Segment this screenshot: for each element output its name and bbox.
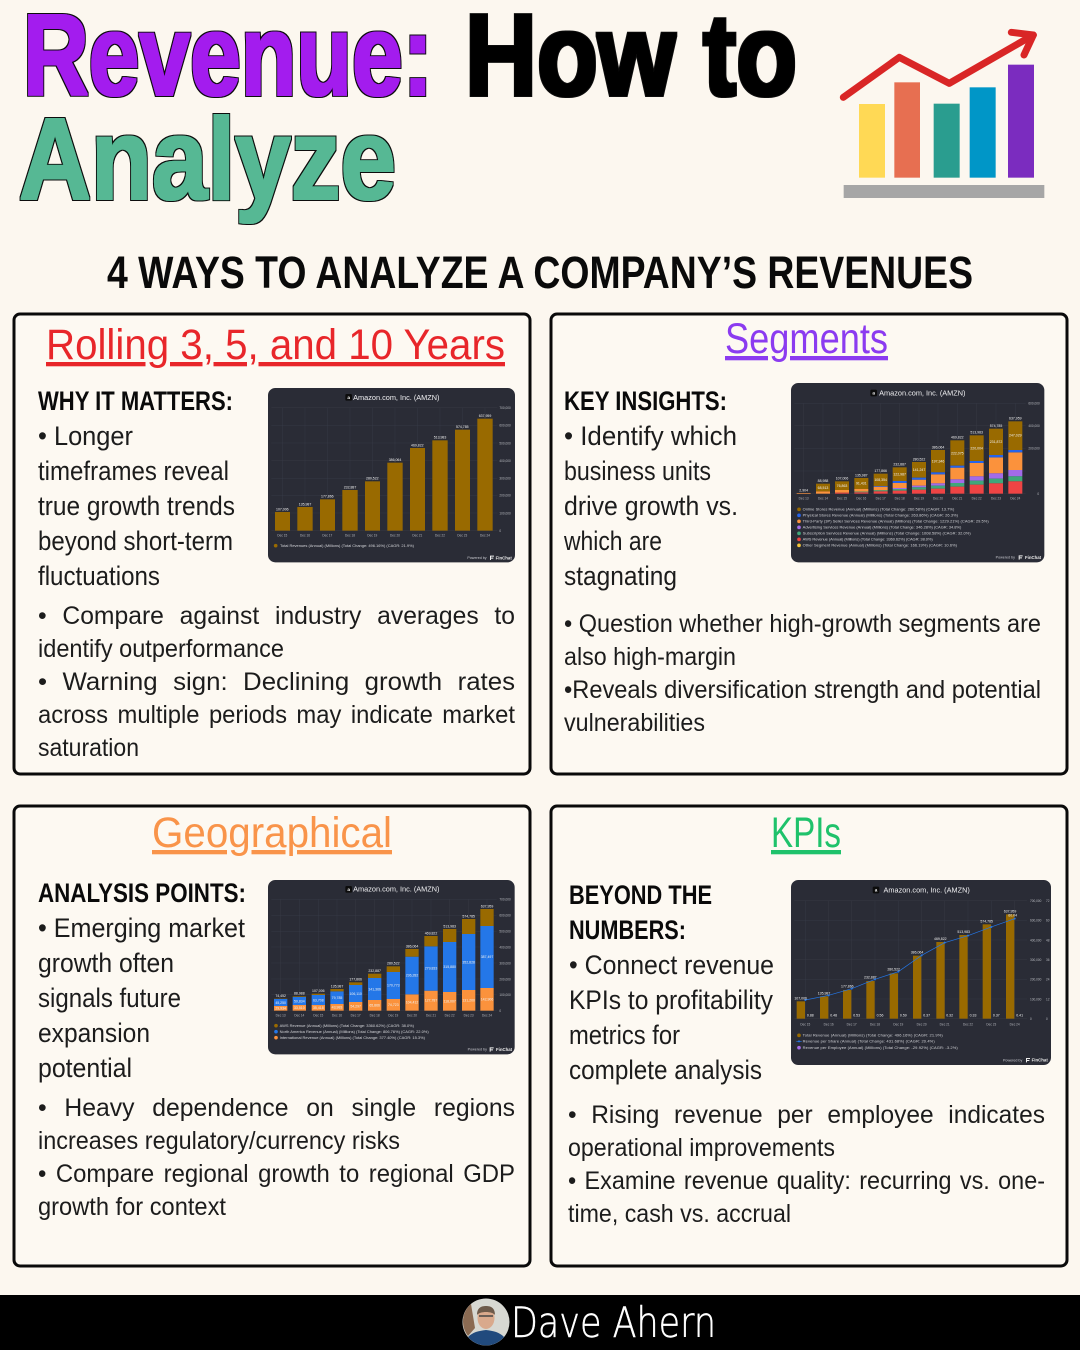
chart: revenue by geography: 33,510 (294, 1006, 305, 1010)
text block: why it matters: identify outperformance (38, 635, 284, 663)
chart: revenue by segment: 222,075 (951, 451, 964, 455)
chart: revenue by geography (268, 880, 515, 1054)
chart: revenue by segment: 197,346 (932, 459, 944, 463)
chart: revenue by segment: Dec 18 (895, 497, 905, 501)
text block: why it matters: • Longer (38, 421, 133, 451)
chart: total revenue bars: Dec 21 (412, 533, 423, 537)
chart: total revenue bars: 177,866 (321, 495, 334, 499)
chart: revenue KPIs: 36 (1046, 958, 1050, 962)
chart: revenue by geography: 118,007 (443, 999, 456, 1003)
chart: revenue by geography: 400,000 (499, 945, 511, 949)
title: Analyze (19, 94, 396, 224)
chart: revenue KPIs: 0.56 (877, 1014, 883, 1018)
chart: revenue KPIs: Dec 23 (986, 1023, 997, 1027)
chart: revenue KPIs: Dec 21 (940, 1023, 950, 1027)
chart: total revenue bars: Total Revenues (Annual) (Millions) (Total Change: 496.16%) (CAGR: 21.9%) (280, 543, 415, 548)
chart: revenue by geography: 600,000 (499, 914, 511, 918)
chart: revenue KPIs: Amazon.com, Inc. (AMZN) (884, 886, 970, 895)
footer bar (0, 1295, 1080, 1350)
panel: rolling years (14, 314, 530, 774)
chart: revenue KPIs: 0.37 (923, 1014, 930, 1018)
chart: revenue by geography: 142,906 (481, 997, 493, 1001)
chart: revenue KPIs: 513,983 (957, 930, 970, 934)
chart: revenue by geography: 387,497 (481, 955, 493, 959)
text block: analysis points: increases regulatory/currency risks (38, 1127, 400, 1155)
chart: revenue KPIs: 400,000 (1030, 938, 1042, 942)
chart: total revenue bars: Dec 15 (277, 533, 288, 537)
chart: revenue by segment: Dec 21 (952, 497, 963, 501)
chart: revenue by segment: Dec 13 (799, 497, 809, 501)
chart: revenue by geography: 500,000 (499, 930, 511, 934)
chart: revenue by geography: 469,822 (425, 931, 437, 935)
chart: revenue by segment: 135,987 (855, 473, 868, 477)
text block: analysis points: • Compare regional growth to regional GDP (38, 1160, 515, 1188)
chart: revenue KPIs: Total Revenue (Annual) (Millions) (Total Change: 496.16%) (CAGR: 21.9%) (803, 1033, 943, 1038)
chart: revenue by segment: 247,029 (1009, 434, 1022, 438)
chart: revenue by segment: Online Stores Revenue (Annual) (Millions) (Total Change: 260.58%) (CAGR: 13.7%) (803, 507, 955, 512)
author name: Dave Ahern (511, 1298, 716, 1347)
text block: beyond the numbers: BEYOND THE (569, 880, 712, 910)
text block: beyond the numbers: metrics for (569, 1020, 680, 1050)
chart: revenue KPIs (791, 880, 1051, 1065)
chart: total revenue bars: 700,000 (499, 406, 511, 410)
chart: revenue by geography: Amazon.com, Inc. (AMZN) (353, 885, 439, 894)
chart: revenue by geography: Dec 19 (388, 1014, 399, 1018)
chart: revenue by segment: Advertising Services Revenue (Annual) (Millions) (Total Change: 346.28%) (CAGR: 34.8%) (803, 525, 962, 530)
chart: revenue by geography: 63,708 (313, 998, 324, 1002)
text block: beyond the numbers: KPIs to profitability (569, 985, 774, 1015)
chart: revenue by geography: 100,000 (499, 993, 511, 997)
chart: revenue by geography: 54,297 (350, 1004, 361, 1008)
chart: revenue by segment: 220,004 (970, 446, 983, 450)
chart: revenue KPIs: 135,987 (818, 991, 830, 995)
text block: key insights: vulnerabilities (564, 709, 705, 737)
chart: revenue KPIs: 0.53 (853, 1014, 860, 1018)
chart: revenue by segment: Dec 14 (818, 497, 828, 501)
text block: beyond the numbers (568, 880, 1045, 1228)
chart: revenue KPIs: Revenue per Share (Annual) (Total Change: 431.68%) (CAGR: 20.4%) (803, 1039, 935, 1044)
chart: revenue by geography: Dec 14 (294, 1014, 305, 1018)
chart: revenue KPIs: 0.37 (993, 1014, 1000, 1018)
chart: revenue by geography: 88,988 (294, 992, 305, 996)
chart: total revenue bars: Dec 18 (345, 533, 355, 537)
text block: key insights: business units (564, 456, 711, 486)
chart: revenue KPIs: 386,064 (911, 951, 923, 955)
text block: why it matters: beyond short-term (38, 526, 233, 556)
chart: revenue by geography: 104,412 (406, 1001, 418, 1005)
chart: total revenue bars: Dec 17 (322, 533, 333, 537)
text block: why it matters: timeframes reveal (38, 456, 229, 486)
chart: revenue KPIs: 0.41 (1016, 1014, 1023, 1018)
text block: analysis points: growth often (38, 948, 174, 978)
heading: segments: Segments (725, 315, 888, 363)
chart: revenue KPIs: 48 (1046, 938, 1050, 942)
text block: key insights: • Identify which (564, 421, 737, 451)
chart: total revenue bars: Amazon.com, Inc. (AMZN) (353, 393, 439, 402)
text block: why it matters: • Compare against industry averages to (38, 602, 515, 630)
chart: revenue KPIs: 60.04 (1008, 914, 1017, 918)
chart: revenue by segment: 88,988 (818, 479, 828, 483)
text block: analysis points: ANALYSIS POINTS: (38, 878, 246, 908)
chart: revenue KPIs: FinChat (1032, 1058, 1048, 1063)
chart: revenue by segment: Dec 23 (991, 497, 1001, 501)
chart: revenue by geography: Dec 21 (426, 1014, 436, 1018)
chart: revenue by geography: 700,000 (499, 898, 511, 902)
chart: revenue by geography: 43,983 (332, 1005, 342, 1009)
text block: why it matters: • Warning sign: Declining growth rates (38, 668, 515, 696)
text block: key insights: which are (563, 526, 662, 556)
chart: revenue by geography: Powered by (468, 1048, 487, 1052)
chart: revenue by geography: 107,006 (312, 989, 325, 993)
chart: total revenue bars: 513,983 (434, 436, 446, 440)
chart: revenue KPIs: 60 (1046, 919, 1050, 923)
chart: revenue by segment: 280,522 (913, 457, 925, 461)
chart: total revenue bars: 637,959 (479, 414, 491, 418)
chart: total revenue bars: 400,000 (499, 459, 511, 463)
chart: revenue by segment: Dec 20 (933, 497, 943, 501)
chart: revenue KPIs: 0.88 (807, 1014, 814, 1018)
text block: why it matters: WHY IT MATTERS: (38, 386, 233, 416)
chart: revenue by geography: Dec 13 (276, 1014, 286, 1018)
icon: author avatar (462, 1298, 510, 1346)
chart: revenue KPIs: 600,000 (1030, 919, 1042, 923)
chart: revenue by segment: Other Segment Revenue (Annual) (Millions) (Total Change: 166.19%) (CAGR: 10.6%) (803, 543, 958, 548)
chart: revenue KPIs: Dec 16 (824, 1023, 834, 1027)
chart: revenue by geography: North America Revenue (Annual) (Millions) (Total Change: 806.76%) (CAGR: 22.0%) (280, 1029, 429, 1034)
text block: beyond the numbers: time, cash vs. accrual (568, 1200, 791, 1228)
chart: revenue KPIs: Powered by (1003, 1058, 1022, 1062)
chart: revenue KPIs: 0 (1046, 1017, 1048, 1021)
chart: total revenue bars: a (347, 395, 350, 400)
chart: revenue KPIs: Revenue per Employee (Annual) (Millions) (Total Change: -29.92%) (CAGR: -3.2%) (803, 1045, 958, 1050)
heading: geographical: Geographical (152, 809, 392, 857)
chart: revenue by geography: 177,866 (349, 978, 362, 982)
chart: total revenue bars: 107,006 (276, 507, 289, 511)
chart: revenue by segment: 91,431 (856, 482, 867, 486)
chart: revenue by geography: AWS Revenue (Annual) (Millions) (Total Change: 3360.62%) (CAGR: 38.0%) (280, 1023, 415, 1028)
chart: revenue by geography: a (347, 887, 350, 892)
chart: revenue by geography: 35,418 (313, 1006, 324, 1010)
chart: total revenue bars: Dec 20 (390, 533, 400, 537)
chart: total revenue bars: FinChat (496, 555, 512, 560)
chart: revenue by geography: 315,880 (443, 965, 456, 969)
chart: revenue by segment: Amazon.com, Inc. (AMZN) (879, 388, 965, 397)
chart: revenue by geography: Dec 24 (482, 1014, 492, 1018)
chart: revenue KPIs: 700,000 (1030, 899, 1042, 903)
chart: total revenue bars: 386,064 (389, 458, 401, 462)
text block: key insights (563, 386, 1041, 737)
chart: revenue by geography: 170,773 (387, 984, 400, 988)
chart: revenue KPIs: Dec 22 (963, 1023, 973, 1027)
chart: revenue KPIs: 0.33 (970, 1014, 976, 1018)
chart: revenue KPIs: 637,959 (1004, 909, 1016, 913)
chart: total revenue bars (268, 388, 515, 562)
chart: revenue by geography: 65,866 (369, 1003, 380, 1007)
chart: revenue by geography: 45,250 (275, 1001, 286, 1005)
text block: key insights: drive growth vs. (564, 491, 738, 521)
chart: revenue by segment: Dec 24 (1010, 497, 1021, 501)
chart: revenue by segment: 637,959 (1009, 417, 1022, 421)
text block: beyond the numbers: • Connect revenue (569, 950, 774, 980)
chart: revenue by segment: Dec 22 (972, 497, 982, 501)
text block: analysis points: • Emerging market (38, 913, 246, 943)
chart: revenue by segment: Dec 19 (914, 497, 924, 501)
chart: revenue KPIs: 0.59 (900, 1014, 907, 1018)
chart: revenue KPIs: 469,822 (934, 937, 947, 941)
text block: analysis points: growth for context (38, 1193, 226, 1221)
chart: revenue KPIs: 177,866 (841, 984, 854, 988)
chart: revenue by geography: 74,723 (388, 1003, 399, 1007)
text block: key insights: • Question whether high-growth segments are (564, 610, 1041, 638)
chart: revenue by geography: 352,828 (462, 960, 475, 964)
chart: revenue by geography: 232,887 (368, 969, 381, 973)
chart: revenue by geography: 513,983 (443, 924, 456, 928)
chart: revenue KPIs: 107,006 (794, 996, 807, 1000)
panel: geographical (14, 806, 530, 1266)
chart: revenue by segment: Subscription Services Revenue (Annual) (Millions) (Total Change: 1008.58%) (CAGR: 32.0%) (803, 531, 971, 536)
chart: revenue by segment: FinChat (1025, 555, 1042, 560)
text block: analysis points: expansion (38, 1018, 150, 1048)
chart: revenue by segment: 400,000 (1028, 424, 1040, 428)
chart: revenue by geography: 280,522 (387, 962, 400, 966)
chart: revenue KPIs: Dec 24 (1010, 1023, 1020, 1027)
chart: revenue by segment: 600,000 (1028, 402, 1040, 406)
text block: beyond the numbers: operational improvements (568, 1134, 835, 1162)
text block: analysis points (38, 878, 515, 1221)
chart: revenue KPIs: 12 (1046, 997, 1050, 1001)
title (19, 0, 797, 224)
text block: why it matters (38, 386, 515, 762)
chart: revenue by segment: 0 (1037, 492, 1039, 496)
chart: revenue by geography: 135,987 (331, 984, 343, 988)
chart: revenue by geography: 79,785 (332, 996, 342, 1000)
chart: revenue by segment: a (872, 391, 875, 396)
chart: revenue KPIs: 72 (1046, 899, 1050, 903)
chart: revenue by geography: 29,934 (275, 1006, 286, 1010)
text block: why it matters: across multiple periods may indicate market (38, 701, 515, 729)
chart: revenue by geography: Dec 15 (313, 1014, 324, 1018)
chart: total revenue bars: Dec 22 (435, 533, 445, 537)
chart: revenue by geography: FinChat (496, 1047, 513, 1052)
chart: revenue KPIs: 280,522 (887, 968, 900, 972)
chart: total revenue bars: Dec 19 (367, 533, 378, 537)
chart: revenue by geography: 637,959 (481, 904, 493, 908)
chart: revenue by segment: 232,887 (893, 463, 906, 467)
chart: total revenue bars: Dec 16 (300, 533, 310, 537)
chart: revenue KPIs: Dec 18 (870, 1023, 880, 1027)
chart: total revenue bars: 135,987 (299, 502, 311, 506)
chart: revenue by geography: 574,785 (462, 914, 475, 918)
chart: revenue by geography: Dec 18 (370, 1014, 380, 1018)
chart: revenue by segment: 513,983 (970, 431, 983, 435)
chart: revenue by geography: 279,833 (425, 967, 437, 971)
text block: analysis points: • Heavy dependence on single regions (38, 1094, 515, 1122)
text block: beyond the numbers: complete analysis (569, 1055, 762, 1085)
heading: KPIs: KPIs (771, 809, 841, 857)
chart: revenue by segment: 177,866 (874, 469, 887, 473)
chart: revenue KPIs: 0.48 (830, 1014, 837, 1018)
chart: revenue KPIs: Dec 20 (917, 1023, 927, 1027)
chart: revenue by geography: 300,000 (499, 961, 511, 965)
text block: key insights: also high-margin (564, 643, 736, 671)
chart: revenue KPIs: 0.32 (946, 1014, 953, 1018)
chart: total revenue bars: 600,000 (499, 424, 511, 428)
chart: revenue KPIs: 200,000 (1030, 978, 1042, 982)
text block: why it matters: fluctuations (38, 561, 160, 591)
panel: KPIs (551, 806, 1067, 1266)
chart: total revenue bars: 200,000 (499, 494, 511, 498)
chart: revenue KPIs: a (875, 888, 878, 893)
chart: revenue KPIs: 232,887 (864, 975, 877, 979)
chart: revenue by segment: 76,863 (837, 484, 847, 488)
chart: total revenue bars: 232,887 (344, 485, 356, 489)
chart: revenue KPIs: 574,785 (980, 919, 993, 923)
chart: revenue KPIs: Dec 15 (800, 1023, 811, 1027)
chart: total revenue bars: 0 (499, 529, 501, 533)
chart: revenue by segment: Dec 16 (856, 497, 867, 501)
chart: revenue by segment: Powered by (996, 556, 1015, 560)
chart: revenue by segment: 200,000 (1028, 447, 1040, 451)
chart: total revenue bars: 100,000 (499, 511, 511, 515)
text block: why it matters: true growth trends (38, 491, 235, 521)
text block: beyond the numbers: • Examine revenue quality: recurring vs. one- (568, 1167, 1045, 1195)
text block: beyond the numbers: • Rising revenue per employee indicates (568, 1101, 1045, 1129)
chart: total revenue bars: 300,000 (499, 477, 511, 481)
text block: analysis points: signals future (38, 983, 181, 1013)
chart: revenue by segment: 386,064 (932, 445, 944, 449)
chart: revenue by segment: 231,872 (990, 440, 1002, 444)
chart: total revenue bars: Powered by (467, 556, 487, 560)
chart: revenue by geography: 131,200 (462, 998, 475, 1002)
chart: revenue by geography: 127,787 (425, 999, 437, 1003)
chart: revenue by geography: Dec 23 (464, 1014, 474, 1018)
chart: revenue by segment: 469,822 (951, 436, 964, 440)
chart: revenue by geography: 74,452 (275, 994, 286, 998)
chart: total revenue bars: Dec 23 (457, 533, 468, 537)
icon: rising bar chart with arrow (843, 32, 1044, 198)
panel: segments (551, 314, 1067, 774)
chart: revenue by segment: 107,006 (836, 477, 848, 481)
chart: revenue by segment: 108,354 (874, 478, 887, 482)
text block: analysis points: potential (38, 1053, 132, 1083)
chart: total revenue bars: 500,000 (499, 441, 511, 445)
text block: key insights: KEY INSIGHTS: (564, 386, 727, 416)
chart: revenue KPIs: Dec 17 (847, 1023, 857, 1027)
chart: revenue by segment: 574,785 (990, 424, 1002, 428)
chart: revenue by geography: 0 (499, 1009, 501, 1013)
chart: revenue by segment: 2,904 (799, 489, 808, 493)
text block: beyond the numbers: NUMBERS: (569, 915, 686, 945)
chart: revenue by segment: Dec 15 (837, 497, 847, 501)
chart: revenue by segment: Third-Party (3P) Seller Services Revenue (Annual) (Millions) (Total Change: 1229.21%) (CAGR: 29.5%) (803, 519, 989, 524)
chart: revenue KPIs: 24 (1046, 978, 1050, 982)
chart: revenue by geography: Dec 17 (351, 1014, 361, 1018)
text block: key insights: •Reveals diversification strength and potential (564, 676, 1041, 704)
chart: revenue by geography: 106,110 (349, 992, 362, 996)
chart: total revenue bars: 280,522 (366, 477, 379, 481)
heading: rolling years: Rolling 3, 5, and 10 Years (46, 321, 505, 369)
chart: revenue by segment: 141,247 (913, 468, 925, 472)
chart: total revenue bars: 469,822 (411, 443, 424, 447)
chart: revenue by geography: 236,282 (406, 974, 418, 978)
text block: key insights: stagnating (564, 561, 677, 591)
chart: revenue by geography: 386,064 (406, 944, 418, 948)
chart: revenue by geography: 50,834 (294, 999, 305, 1003)
text block: why it matters: saturation (38, 734, 139, 762)
chart: revenue by geography: 200,000 (499, 977, 511, 981)
chart: revenue by segment: 122,987 (893, 472, 906, 476)
chart: total revenue bars: 574,785 (456, 425, 469, 429)
chart: revenue by geography: Dec 20 (407, 1014, 417, 1018)
chart: revenue KPIs: 300,000 (1030, 958, 1042, 962)
chart: revenue by geography: International Revenue (Annual) (Millions) (Total Change: 377.40%) (CAGR: 15.3%) (280, 1035, 426, 1040)
chart: revenue by segment (791, 383, 1044, 562)
chart: total revenue bars: Dec 24 (480, 533, 490, 537)
chart: revenue by geography: Dec 16 (332, 1014, 342, 1018)
chart: revenue by segment: Dec 17 (876, 497, 886, 501)
chart: revenue by geography: 141,366 (368, 987, 381, 991)
chart: revenue by geography: Dec 22 (445, 1014, 455, 1018)
chart: revenue by segment: Physical Stores Revenue (Annual) (Millions) (Total Change: 263.86%) (CAGR: 26.3%) (803, 513, 959, 518)
chart: revenue KPIs: 100,000 (1030, 997, 1042, 1001)
chart: revenue by segment: AWS Revenue (Annual) (Millions) (Total Change: 3360.62%) (CAGR: 38.0%) (803, 537, 933, 542)
chart: revenue KPIs: Dec 19 (893, 1023, 904, 1027)
chart: revenue KPIs: 0 (1030, 1017, 1032, 1021)
chart: revenue by segment: 68,513 (818, 486, 828, 490)
